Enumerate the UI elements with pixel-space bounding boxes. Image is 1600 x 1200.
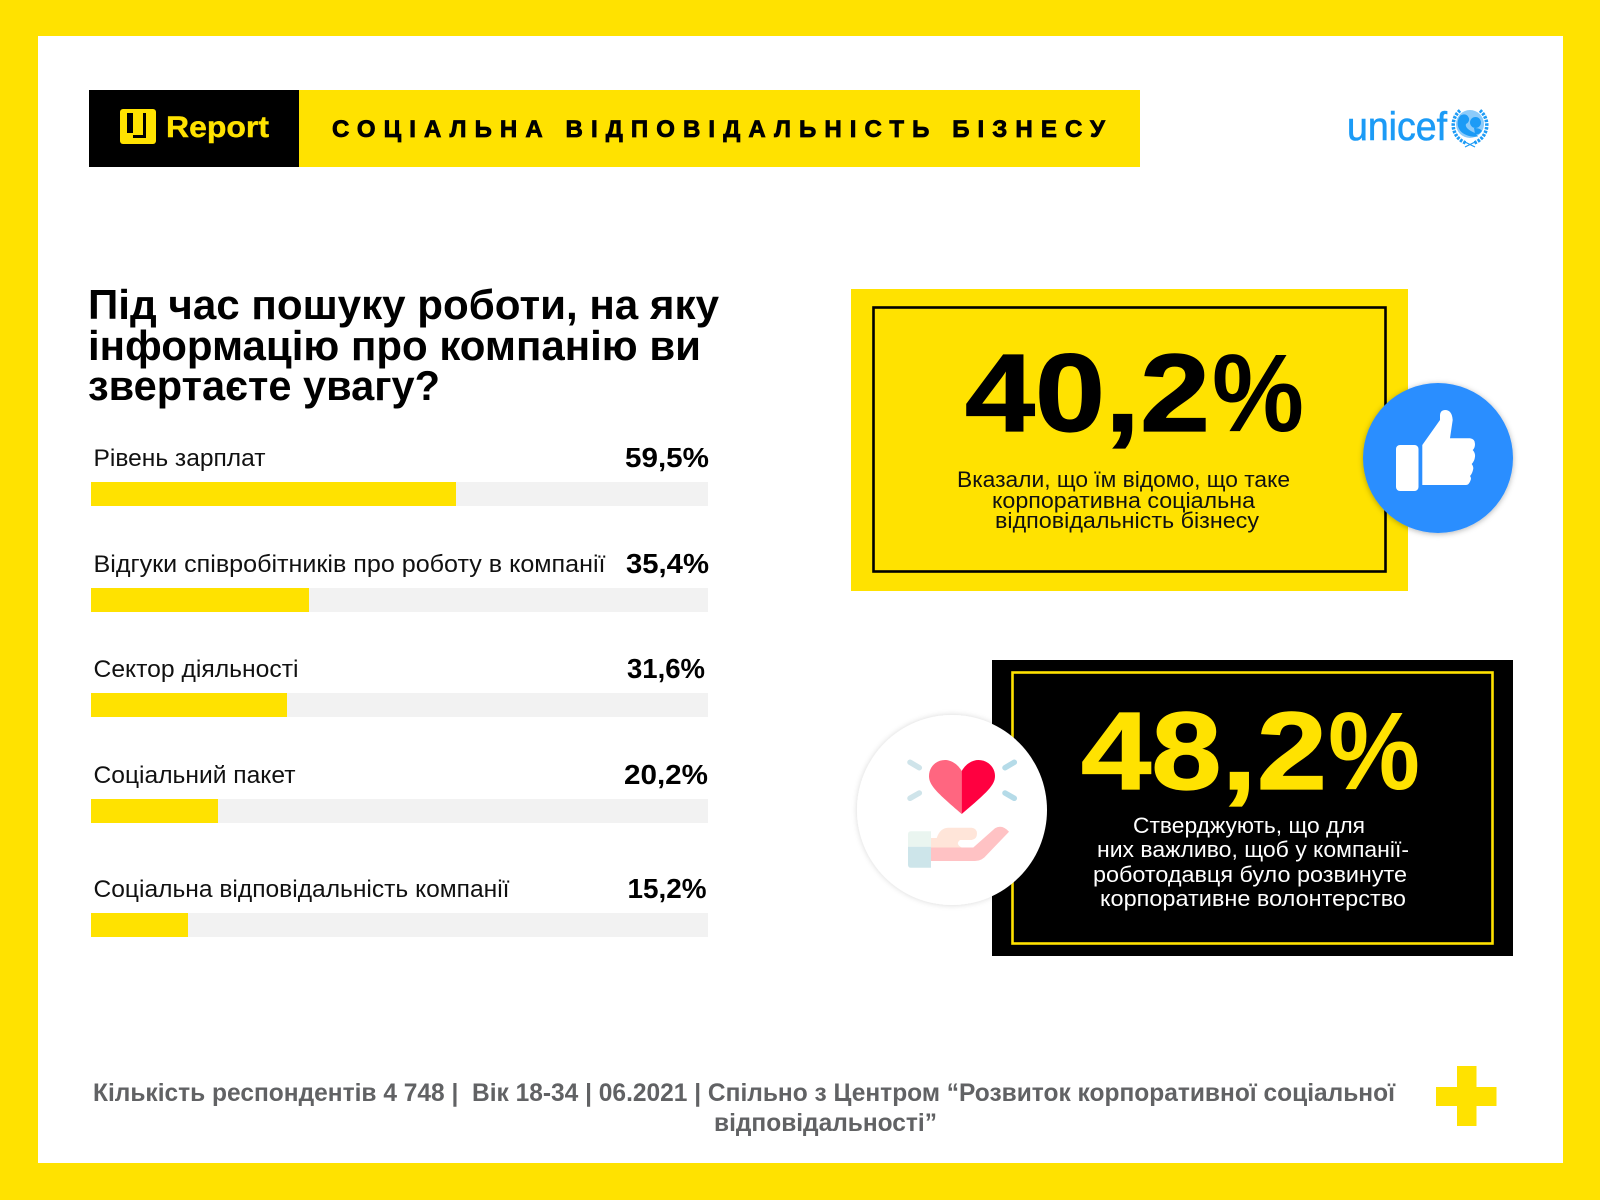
question heading	[88, 281, 720, 409]
footer note: відповідальності”	[714, 1109, 937, 1137]
row: Рівень зарплат: 59,5%	[625, 442, 709, 473]
row: Відгуки співробітників	[91, 548, 709, 612]
stat 40,2%	[965, 332, 1304, 455]
bar chart	[91, 442, 709, 937]
row: Відгуки співробітників: Відгуки співробітників про роботу в компанії	[94, 551, 606, 578]
stat 48,2%: 48,2	[1081, 690, 1327, 813]
icon: yellow plus	[1436, 1066, 1496, 1126]
U-Report logo: Report	[166, 111, 269, 144]
panel: 48,2%	[992, 660, 1513, 956]
row: Сектор діяльності	[91, 653, 708, 717]
row: Рівень зарплат	[91, 442, 709, 506]
row: Соціальна відповідальність компанії: Соціальна відповідальність компанії	[94, 876, 510, 903]
row: Сектор діяльності: Сектор діяльності	[94, 656, 298, 683]
header band	[89, 90, 1140, 167]
footer note	[93, 1079, 1396, 1137]
icon: thumbs up	[1363, 383, 1513, 533]
stat 40,2%: 40,2	[965, 332, 1210, 455]
row: Відгуки співробітників: 35,4%	[626, 548, 709, 579]
question heading: Під час пошуку роботи, на яку	[88, 281, 720, 328]
stat description: роботодавця було розвинуте	[1093, 862, 1407, 887]
footer note: Кількість респондентів 4 748 | Вік 18-34 | 06.2021 | Спільно з Центром “Розвиток корпоративної соціальної	[93, 1079, 1396, 1107]
header title: СОЦІАЛЬНА ВІДПОВІДАЛЬНІСТЬ БІЗНЕСУ	[332, 116, 1106, 143]
U-Report logo	[120, 109, 269, 144]
stat description: відповідальність бізнесу	[995, 508, 1259, 533]
row: Соціальний пакет	[91, 759, 708, 823]
row: Соціальний пакет: Соціальний пакет	[94, 762, 296, 789]
row: Сектор діяльності: 31,6%	[627, 653, 705, 684]
icon: heart in hand	[857, 715, 1047, 905]
stat description	[957, 467, 1290, 533]
row: Соціальна відповідальність компанії: 15,2%	[628, 873, 707, 904]
question heading: звертаєте увагу?	[88, 362, 440, 409]
unicef logo: unicef	[1347, 105, 1448, 149]
panel: 40,2%	[851, 289, 1408, 591]
row: Соціальний пакет: 20,2%	[624, 759, 708, 790]
stat 40,2%: %	[1212, 332, 1304, 455]
stat description: Вказали, що їм відомо, що таке	[957, 467, 1290, 492]
stat description	[1093, 813, 1409, 911]
row: Рівень зарплат: Рівень зарплат	[94, 445, 266, 472]
stat description: Стверджують, що для	[1133, 813, 1365, 838]
stat 48,2%	[1081, 690, 1420, 813]
question heading: інформацію про компанію ви	[88, 322, 701, 369]
stat description: корпоративне волонтерство	[1100, 886, 1406, 911]
stat description: них важливо, щоб у компанії-	[1097, 837, 1409, 862]
stat 48,2%: %	[1328, 690, 1420, 813]
row: Соціальна відповідальність компанії	[91, 873, 708, 937]
stat description: корпоративна соціальна	[992, 488, 1256, 513]
